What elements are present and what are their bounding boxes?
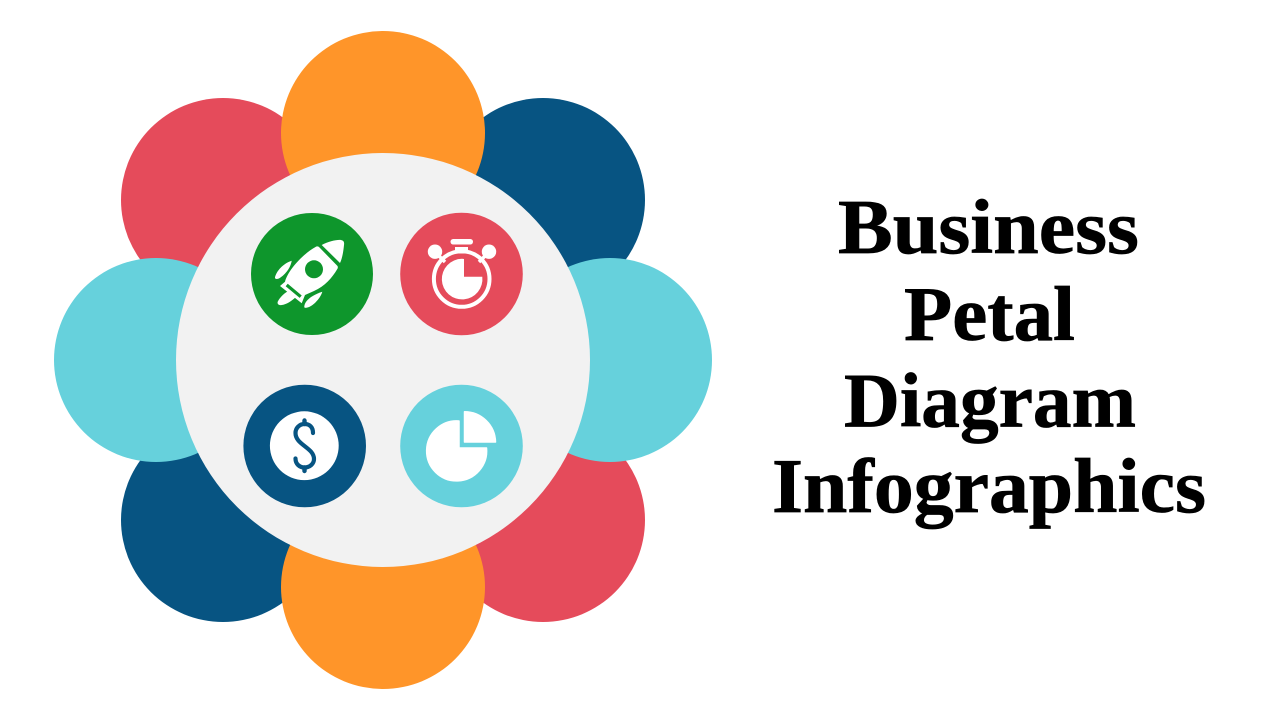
title: Diagram	[844, 358, 1136, 444]
petal: bottom-right red	[441, 418, 645, 622]
title: Infographics	[772, 443, 1206, 529]
icon: rocket	[251, 213, 373, 335]
petal: left cyan	[54, 258, 258, 462]
icon: pie chart	[400, 385, 523, 507]
petal: right cyan	[508, 258, 712, 462]
petal: bottom-left navy	[121, 418, 325, 622]
icon: dollar coin	[243, 385, 366, 507]
petal: top-right navy	[441, 98, 645, 302]
petal: top-left red	[121, 98, 325, 302]
title	[772, 184, 1206, 529]
title: Petal	[904, 271, 1075, 357]
center disc	[176, 153, 590, 567]
petal diagram	[54, 31, 712, 689]
title: Business	[838, 184, 1139, 270]
petal: bottom orange	[281, 485, 485, 689]
icon: stopwatch	[400, 213, 523, 335]
petal: top orange	[281, 31, 485, 235]
